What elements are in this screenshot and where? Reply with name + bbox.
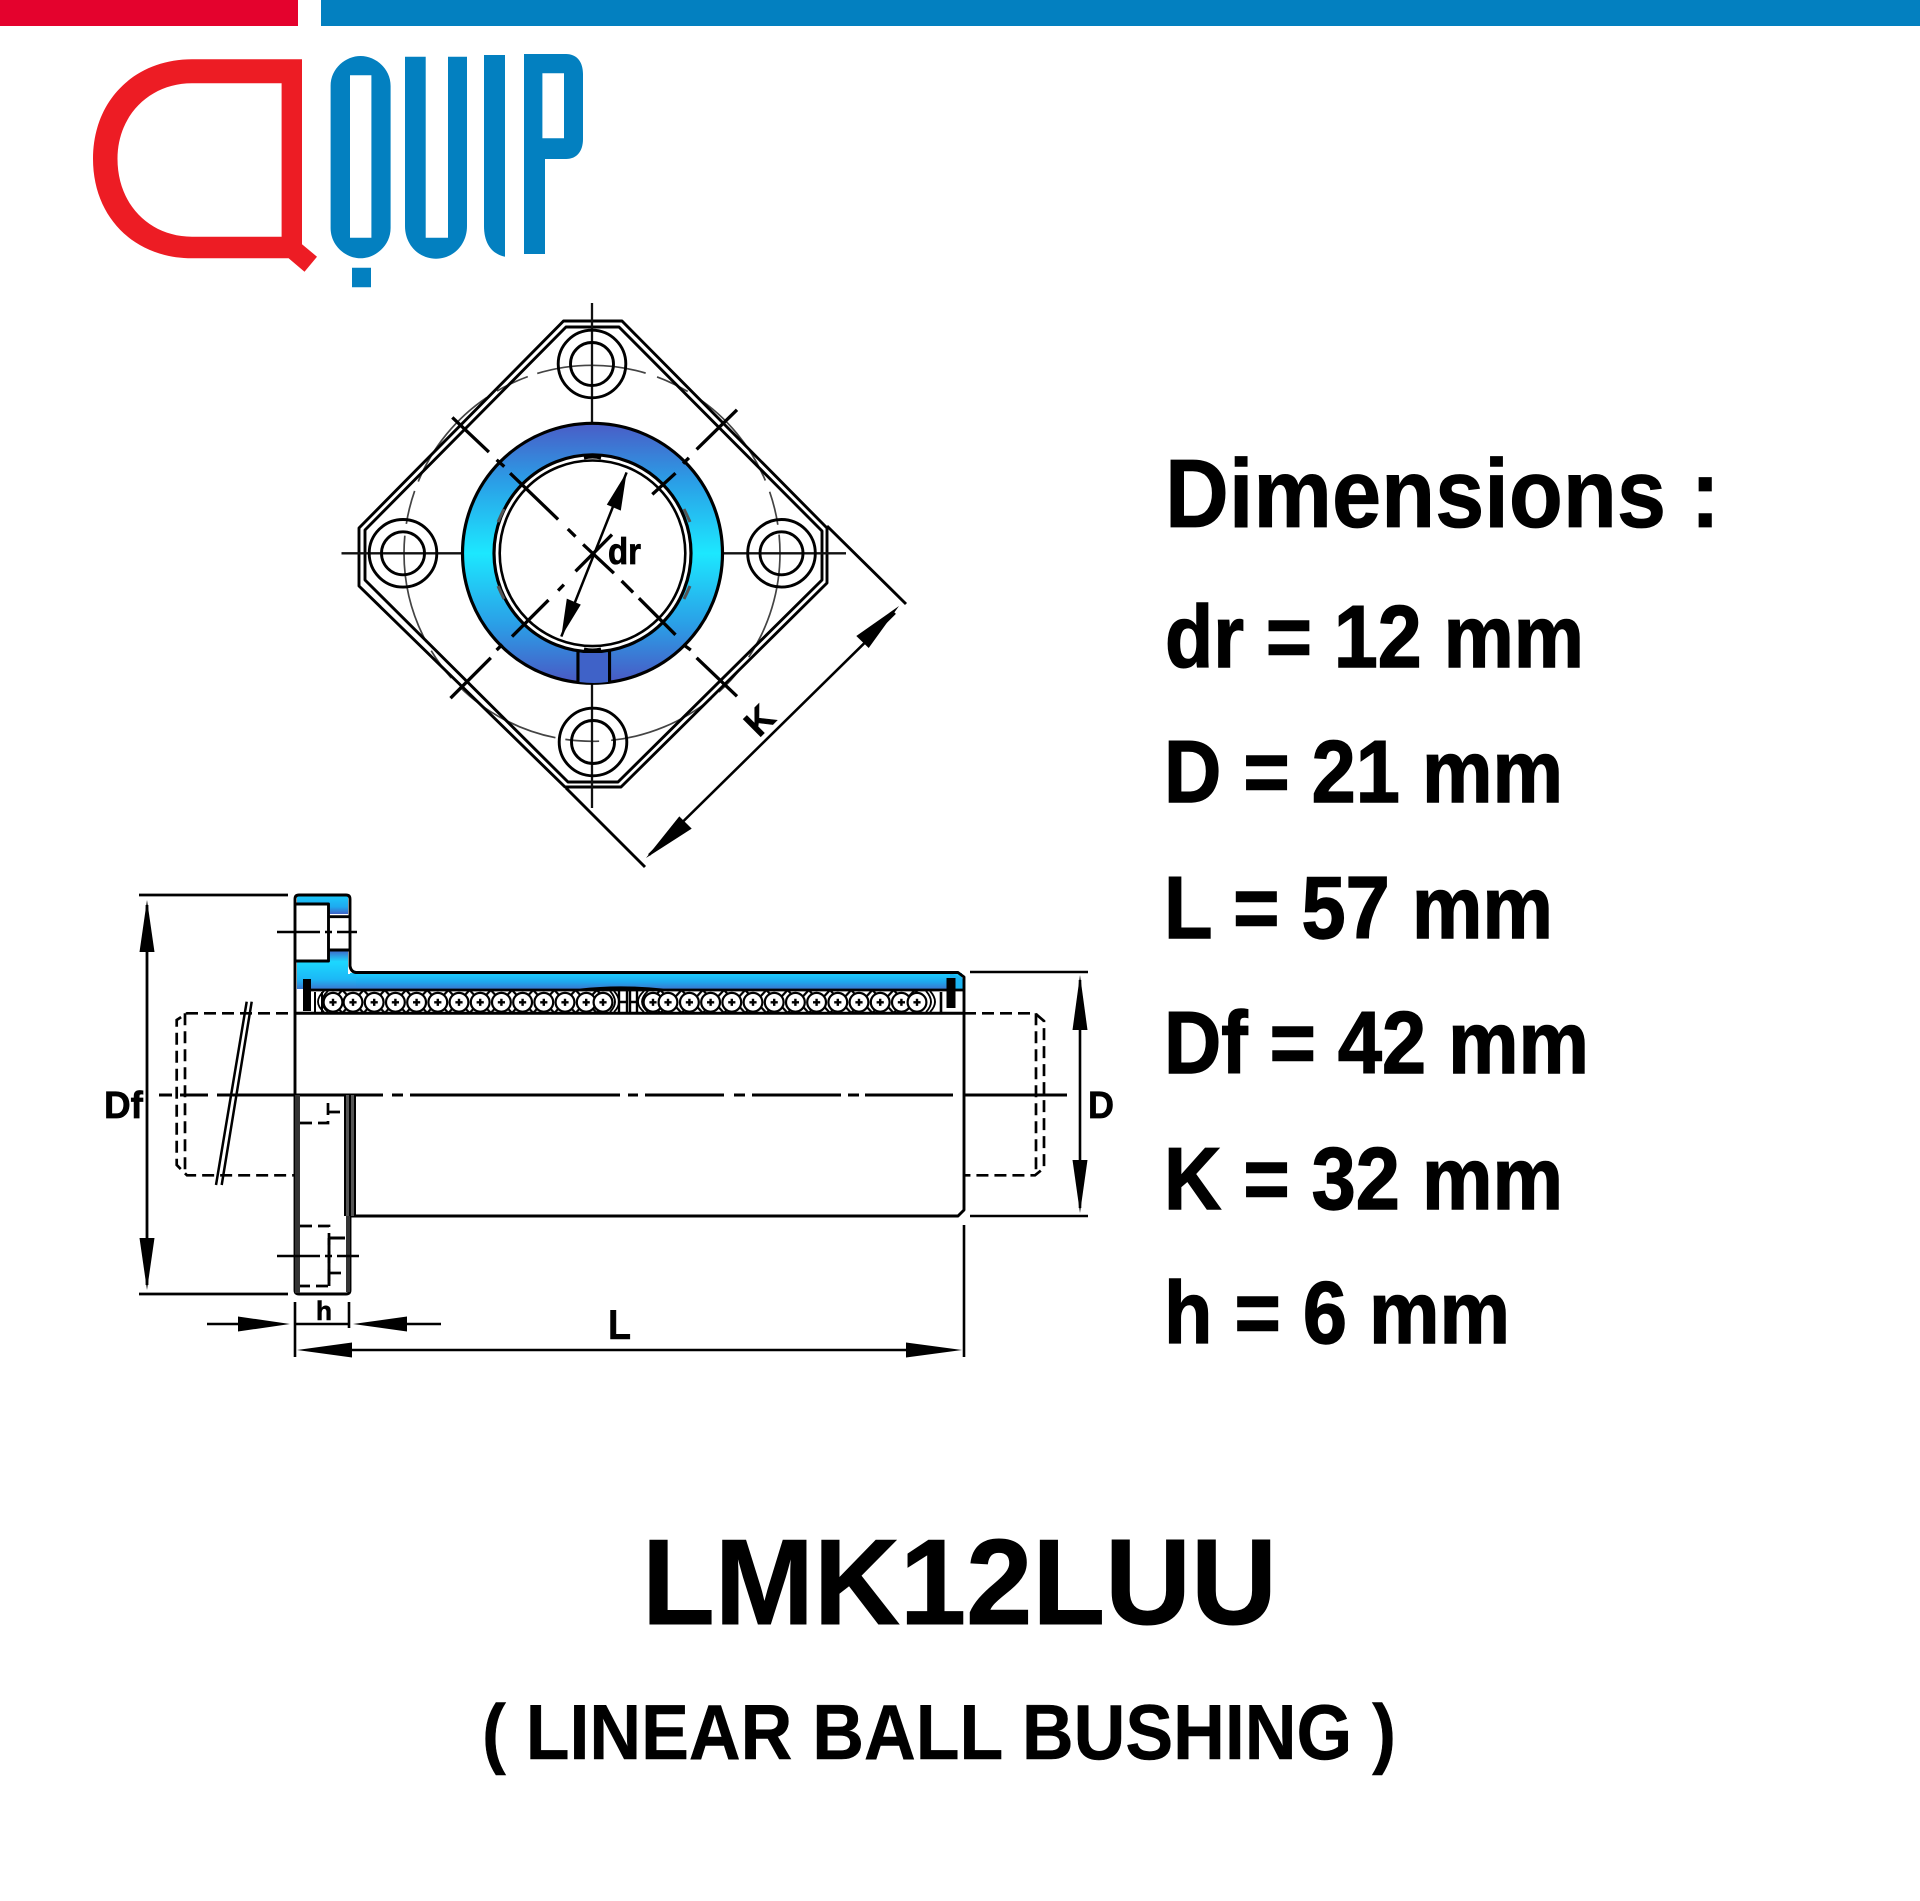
dr dimension arrow (561, 472, 627, 637)
flange and body outline (295, 895, 964, 1294)
L label: L (608, 1301, 631, 1348)
bearing bore line (295, 1012, 964, 1015)
sleeve bottom line (311, 988, 964, 990)
bolt circle (404, 365, 780, 741)
logo letter Q in red (93, 59, 317, 272)
flange outline inner (365, 327, 822, 782)
D label: D (1088, 1085, 1114, 1127)
logo letter P (524, 54, 583, 254)
dr label: dr (608, 531, 641, 572)
separator block (619, 991, 637, 1013)
Df value: Df = 42 mm (1164, 993, 1589, 1092)
centre lines (342, 303, 846, 808)
blue bearing ring (462, 423, 722, 683)
mounting hole top (558, 330, 626, 398)
flange outline outer (359, 321, 827, 787)
left shaft dashed outline (177, 1013, 295, 1175)
top view drawing of square flange (342, 303, 906, 867)
dimensions heading: Dimensions : (1165, 439, 1720, 548)
h label: h (316, 1296, 332, 1326)
h dimension (207, 1302, 441, 1357)
flange lower hatch and edges (295, 1095, 355, 1293)
K value: K = 32 mm (1164, 1129, 1563, 1228)
shaft break lines (216, 1002, 252, 1185)
h value: h = 6 mm (1164, 1263, 1510, 1362)
D value: D = 21 mm (1164, 722, 1563, 821)
balls in left track (318, 991, 619, 1012)
side view drawing (104, 895, 1114, 1358)
K label: K (736, 697, 783, 744)
mounting hole right (748, 520, 815, 587)
Df dimension (139, 895, 288, 1294)
mounting hole left (369, 520, 437, 587)
title: part number: LMK12LUU (642, 1514, 1277, 1650)
K dimension (566, 526, 906, 867)
L value: L = 57 mm (1164, 858, 1553, 957)
D dimension (970, 972, 1088, 1216)
top bar: red segment (0, 0, 298, 26)
logo letter O in blue with dot (331, 56, 391, 287)
logo letter I (484, 55, 505, 257)
logo: QUIP (93, 54, 583, 287)
Df label: Df (104, 1085, 143, 1127)
balls in right track (638, 991, 935, 1012)
flange counterbore upper (296, 904, 350, 961)
diagonal dash-dot axes (450, 410, 737, 698)
top bar: blue segment (321, 0, 1920, 26)
right shaft dashed outline (964, 1013, 1044, 1175)
blue sleeve section (297, 896, 964, 989)
axis centre line (159, 1094, 1067, 1096)
subtitle: product type: ( LINEAR BALL BUSHING ) (482, 1688, 1396, 1776)
bolt axis lines (277, 932, 359, 1256)
logo letter U (405, 57, 467, 259)
crosshatch retainer (333, 990, 923, 1013)
mounting hole bottom (559, 708, 627, 776)
end seals (303, 978, 956, 1013)
dimension list (1164, 587, 1589, 1362)
dr value: dr = 12 mm (1165, 587, 1584, 686)
hidden counterbore lines lower flange (300, 1097, 345, 1286)
L dimension (297, 1225, 964, 1358)
